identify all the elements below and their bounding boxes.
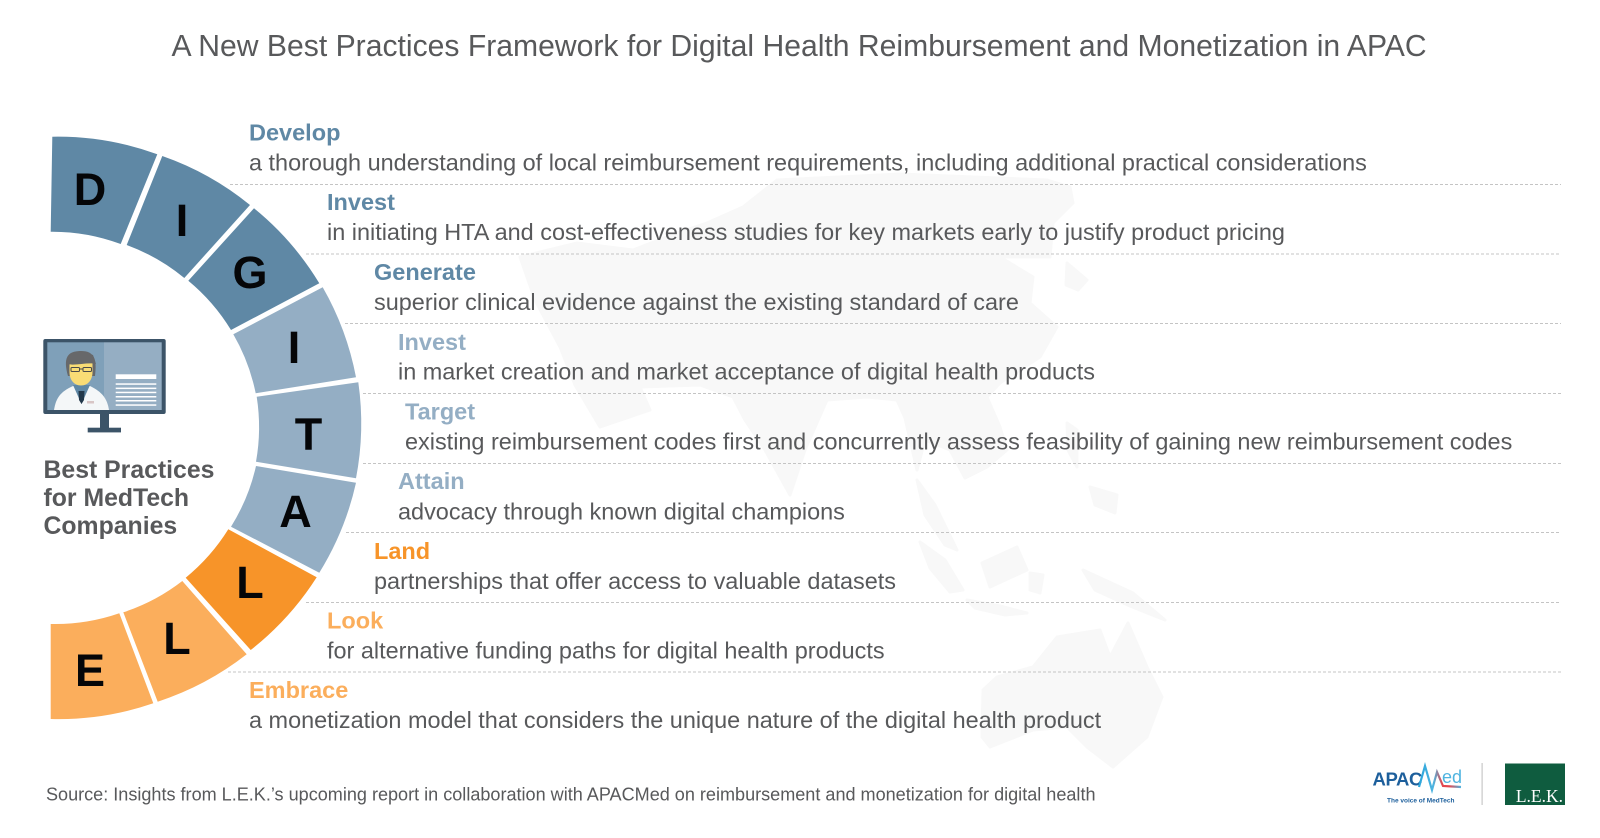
item: Land [374,538,896,594]
segment A [231,466,356,573]
heading: Best Practices for MedTech Companies: Companies [44,513,177,540]
item: Attain: advocacy through known digital champions [398,498,845,524]
item: Attain [398,468,845,524]
segment I: I [288,322,300,373]
item: Invest: Invest [327,189,395,215]
segment D [51,137,157,244]
item: Invest: in initiating HTA and cost-effectiveness studies for key markets early to justify product pricing [327,219,1285,245]
segment L [123,581,247,702]
logo: APACMed: APAC [1372,768,1422,790]
item: Generate: superior clinical evidence against the existing standard of care [374,289,1019,315]
segment L: L [163,613,191,664]
icon: monitor with doctor [43,339,166,432]
item: Land: partnerships that offer access to valuable datasets [374,568,896,594]
item: Invest [398,329,1095,385]
item: Embrace [249,677,1102,733]
item: Develop: a thorough understanding of local reimbursement requirements, including additional practical considerations [249,150,1367,176]
segment E [51,613,153,719]
divider between logos [1482,763,1483,805]
logo: L.E.K. [1505,764,1565,806]
segment T: T [295,409,322,460]
segment G [188,208,319,330]
item: Attain: Attain [398,468,465,494]
item: Invest: Invest [398,329,466,355]
item: Generate: Generate [374,259,476,285]
segment L [186,529,317,650]
segment L: L [236,557,264,608]
item: Look [327,608,885,664]
item: Invest: in market creation and market acceptance of digital health products [398,359,1095,385]
item: Target: existing reimbursement codes first and concurrently assess feasibility of gaining new reimbursement codes [405,429,1512,455]
item: Invest [327,189,1285,245]
logo: L.E.K.: L.E.K. [1516,786,1563,806]
item: Embrace: a monetization model that considers the unique nature of the digital health product [249,707,1102,733]
dial: DIGITALLE segments [51,137,361,719]
item: Land: Land [374,538,430,564]
heading: Best Practices for MedTech Companies: Best Practices [44,457,214,484]
item: Develop [249,120,1367,176]
dashed dividers [228,184,1561,672]
logo: APACMed: ed [1442,767,1462,787]
item: Target: Target [405,398,475,424]
logo: APACMed: The voice of MedTech [1387,798,1454,804]
title: A New Best Practices Framework for Digital Health Reimbursement and Monetization in APAC [172,30,1427,63]
segment I [233,287,356,393]
logo: APACMed [1372,766,1462,804]
item: Embrace: Embrace [249,677,348,703]
segment A: A [279,486,312,537]
item: Look: Look [327,608,384,634]
background map of Asia-Pacific [520,174,1165,767]
item: Generate [374,259,1019,315]
segment I [127,156,250,278]
source note: Source: Insights from L.E.K.’s upcoming report in collaboration with APACMed on reimbursement and monetization for digital health [46,784,1096,804]
heading: Best Practices for MedTech Companies: for MedTech [44,485,189,512]
segment G: G [232,247,268,298]
item: Target [405,398,1512,455]
segment D: D [74,164,106,215]
item: Develop: Develop [249,120,340,146]
segment T [256,382,361,478]
segment E: E [75,645,105,696]
segment I: I [176,195,188,246]
item: Look: for alternative funding paths for digital health products [327,638,885,664]
